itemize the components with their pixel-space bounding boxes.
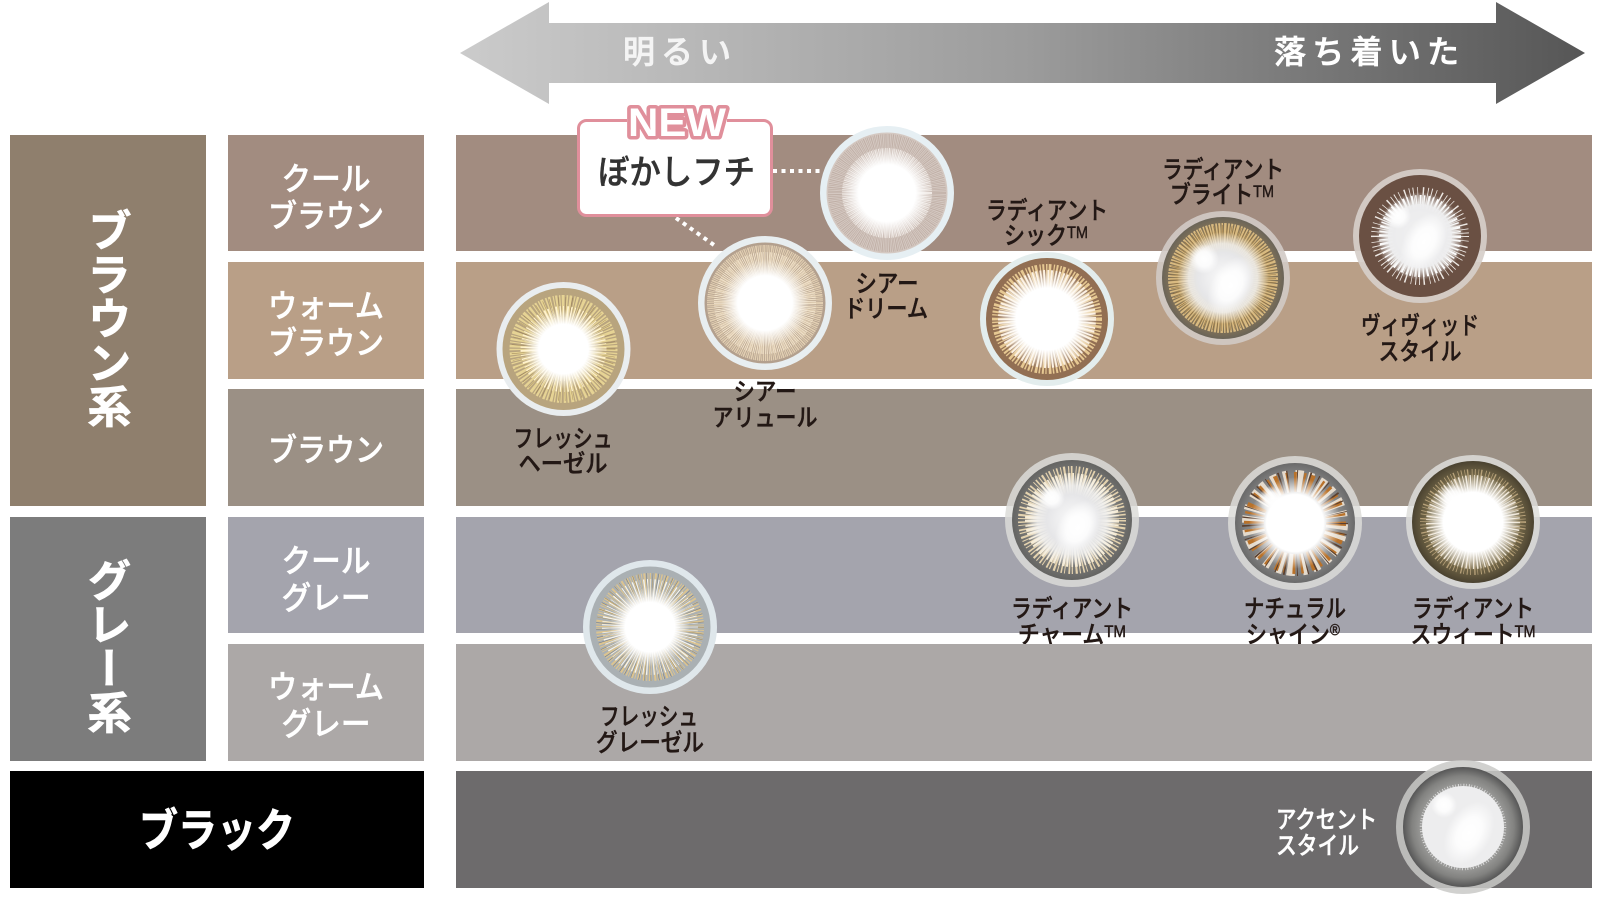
category: warm gray: ウォーム <box>268 669 384 705</box>
lens: fresh hazel <box>496 282 630 478</box>
panel: gray family: グレー系 <box>80 558 130 734</box>
lens: sheer allure <box>698 236 832 432</box>
lens: radiant charm: TM <box>1104 622 1126 641</box>
panel: gray family <box>10 517 206 761</box>
category: brown: ブラウン <box>268 432 384 468</box>
panel: black <box>10 771 424 888</box>
lens: fresh grayzel: グレーゼル <box>596 729 704 757</box>
lens: radiant sweet: スウィート <box>1410 622 1533 649</box>
band: brown <box>456 389 1592 506</box>
arrow label: calm: 落ち着いた <box>1274 34 1459 70</box>
lens: radiant charm <box>1005 453 1139 649</box>
lens: accent style: アクセント <box>1276 807 1377 834</box>
lens: radiant chic <box>980 196 1114 386</box>
category: warm gray <box>228 644 424 761</box>
lens: fresh hazel: フレッシュ <box>514 426 612 453</box>
lens: vivid style: ヴィヴィッド <box>1361 312 1479 340</box>
lens: sheer allure: アリュール <box>712 405 818 432</box>
category: cool brown: ブラウン <box>268 198 384 234</box>
lens: fresh grayzel: フレッシュ <box>600 704 698 731</box>
category: cool brown: クール <box>282 161 370 197</box>
panel: brown family <box>10 135 206 506</box>
lens: radiant bright: TM <box>1253 182 1274 201</box>
category: cool gray: グレー <box>282 580 370 616</box>
lens: radiant bright: ブライト <box>1170 182 1268 209</box>
lens: radiant chic: TM <box>1067 223 1088 242</box>
callout: gradient edge (NEW): ぼかしフチ <box>598 154 755 192</box>
lens: radiant bright: ラディアント <box>1162 155 1284 184</box>
category: warm brown: ブラウン <box>268 325 384 361</box>
band: cool brown <box>456 135 1592 251</box>
lens: radiant chic: ラディアント <box>986 196 1108 225</box>
lens: accent style: スタイル <box>1276 832 1359 860</box>
category: brown <box>228 389 424 506</box>
lens: radiant sweet <box>1406 455 1540 649</box>
lens: natural shine <box>1228 456 1362 649</box>
lens: fresh grayzel <box>583 560 717 757</box>
category: cool gray <box>228 517 424 633</box>
lens: radiant sweet: ラディアント <box>1412 594 1534 623</box>
panel: black: ブラック <box>139 805 295 856</box>
lens: radiant bright <box>1156 155 1290 345</box>
band: black <box>456 771 1592 888</box>
lens: radiant charm: ラディアント <box>1011 594 1133 623</box>
lens: accent style <box>1276 760 1530 894</box>
panel: brown family: ブラウン系 <box>80 208 130 428</box>
lens: sheer dream <box>820 126 954 323</box>
lens: vivid style: スタイル <box>1378 338 1462 366</box>
arrow label: bright: 明るい <box>623 34 731 70</box>
category: cool gray: クール <box>282 543 370 579</box>
callout: gradient edge (NEW) <box>578 101 820 245</box>
lens: sheer dream: ドリーム <box>844 296 928 323</box>
lens: radiant sweet: TM <box>1515 622 1536 641</box>
lens: sheer dream: シアー <box>856 271 918 298</box>
lens: vivid style <box>1353 169 1487 366</box>
lens: sheer allure: シアー <box>734 379 796 406</box>
arrow: brightness scale <box>460 2 1585 104</box>
lens: natural shine: シャイン <box>1246 622 1344 649</box>
band: cool gray <box>456 517 1592 633</box>
category: warm gray: グレー <box>282 706 370 742</box>
band: warm gray <box>456 644 1592 761</box>
lens: fresh hazel: ヘーゼル <box>518 450 608 478</box>
category: cool brown <box>228 135 424 251</box>
category: warm brown: ウォーム <box>268 288 384 324</box>
category: warm brown <box>228 262 424 379</box>
callout: gradient edge (NEW): NEW <box>628 101 726 145</box>
lens: radiant charm: チャーム <box>1018 622 1115 649</box>
lens: natural shine: ® <box>1330 622 1340 639</box>
lens: natural shine: ナチュラル <box>1244 596 1346 623</box>
band: warm brown <box>456 262 1592 379</box>
lens: radiant chic: シック <box>1004 223 1078 250</box>
